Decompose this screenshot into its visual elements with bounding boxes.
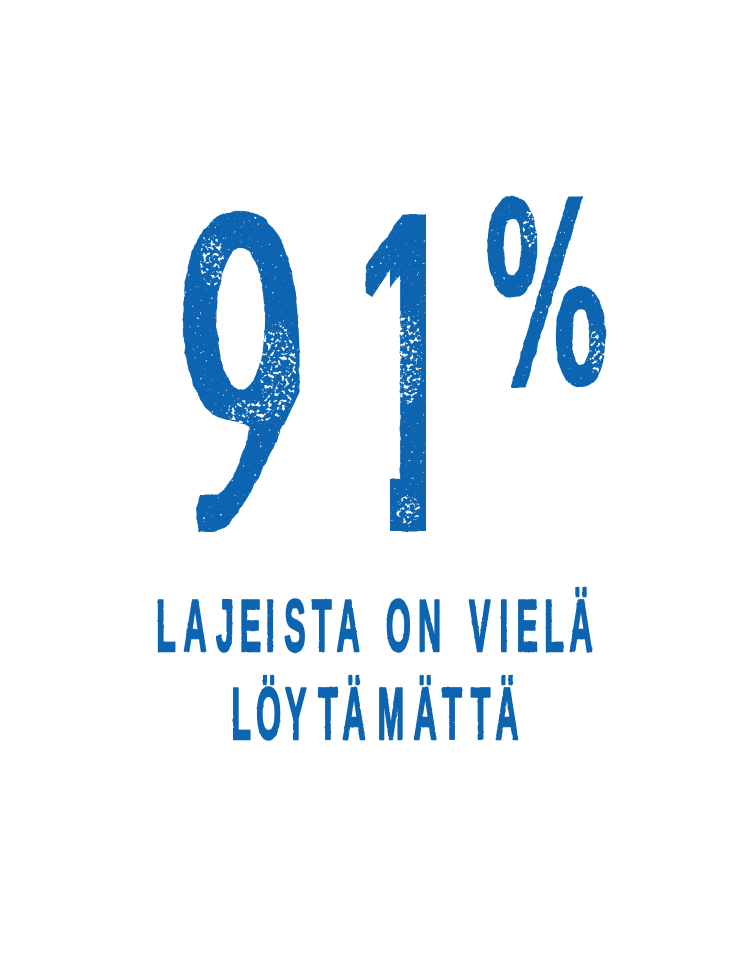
caption line 1: LAJEISTA ON VIELÄ: [156, 585, 593, 667]
percent sign: %: [484, 152, 609, 442]
digit 9: 9: [175, 118, 308, 623]
caption line 2: LÖYTÄMÄTTÄ: [231, 673, 519, 755]
big number: 91%: [182, 196, 606, 532]
caption: LAJEISTA ON VIELÄ LÖYTÄMÄTTÄ: [156, 585, 593, 755]
digit 1: 1: [353, 119, 469, 624]
digit 9: [182, 210, 300, 532]
distressed ink texture: [180, 205, 610, 535]
